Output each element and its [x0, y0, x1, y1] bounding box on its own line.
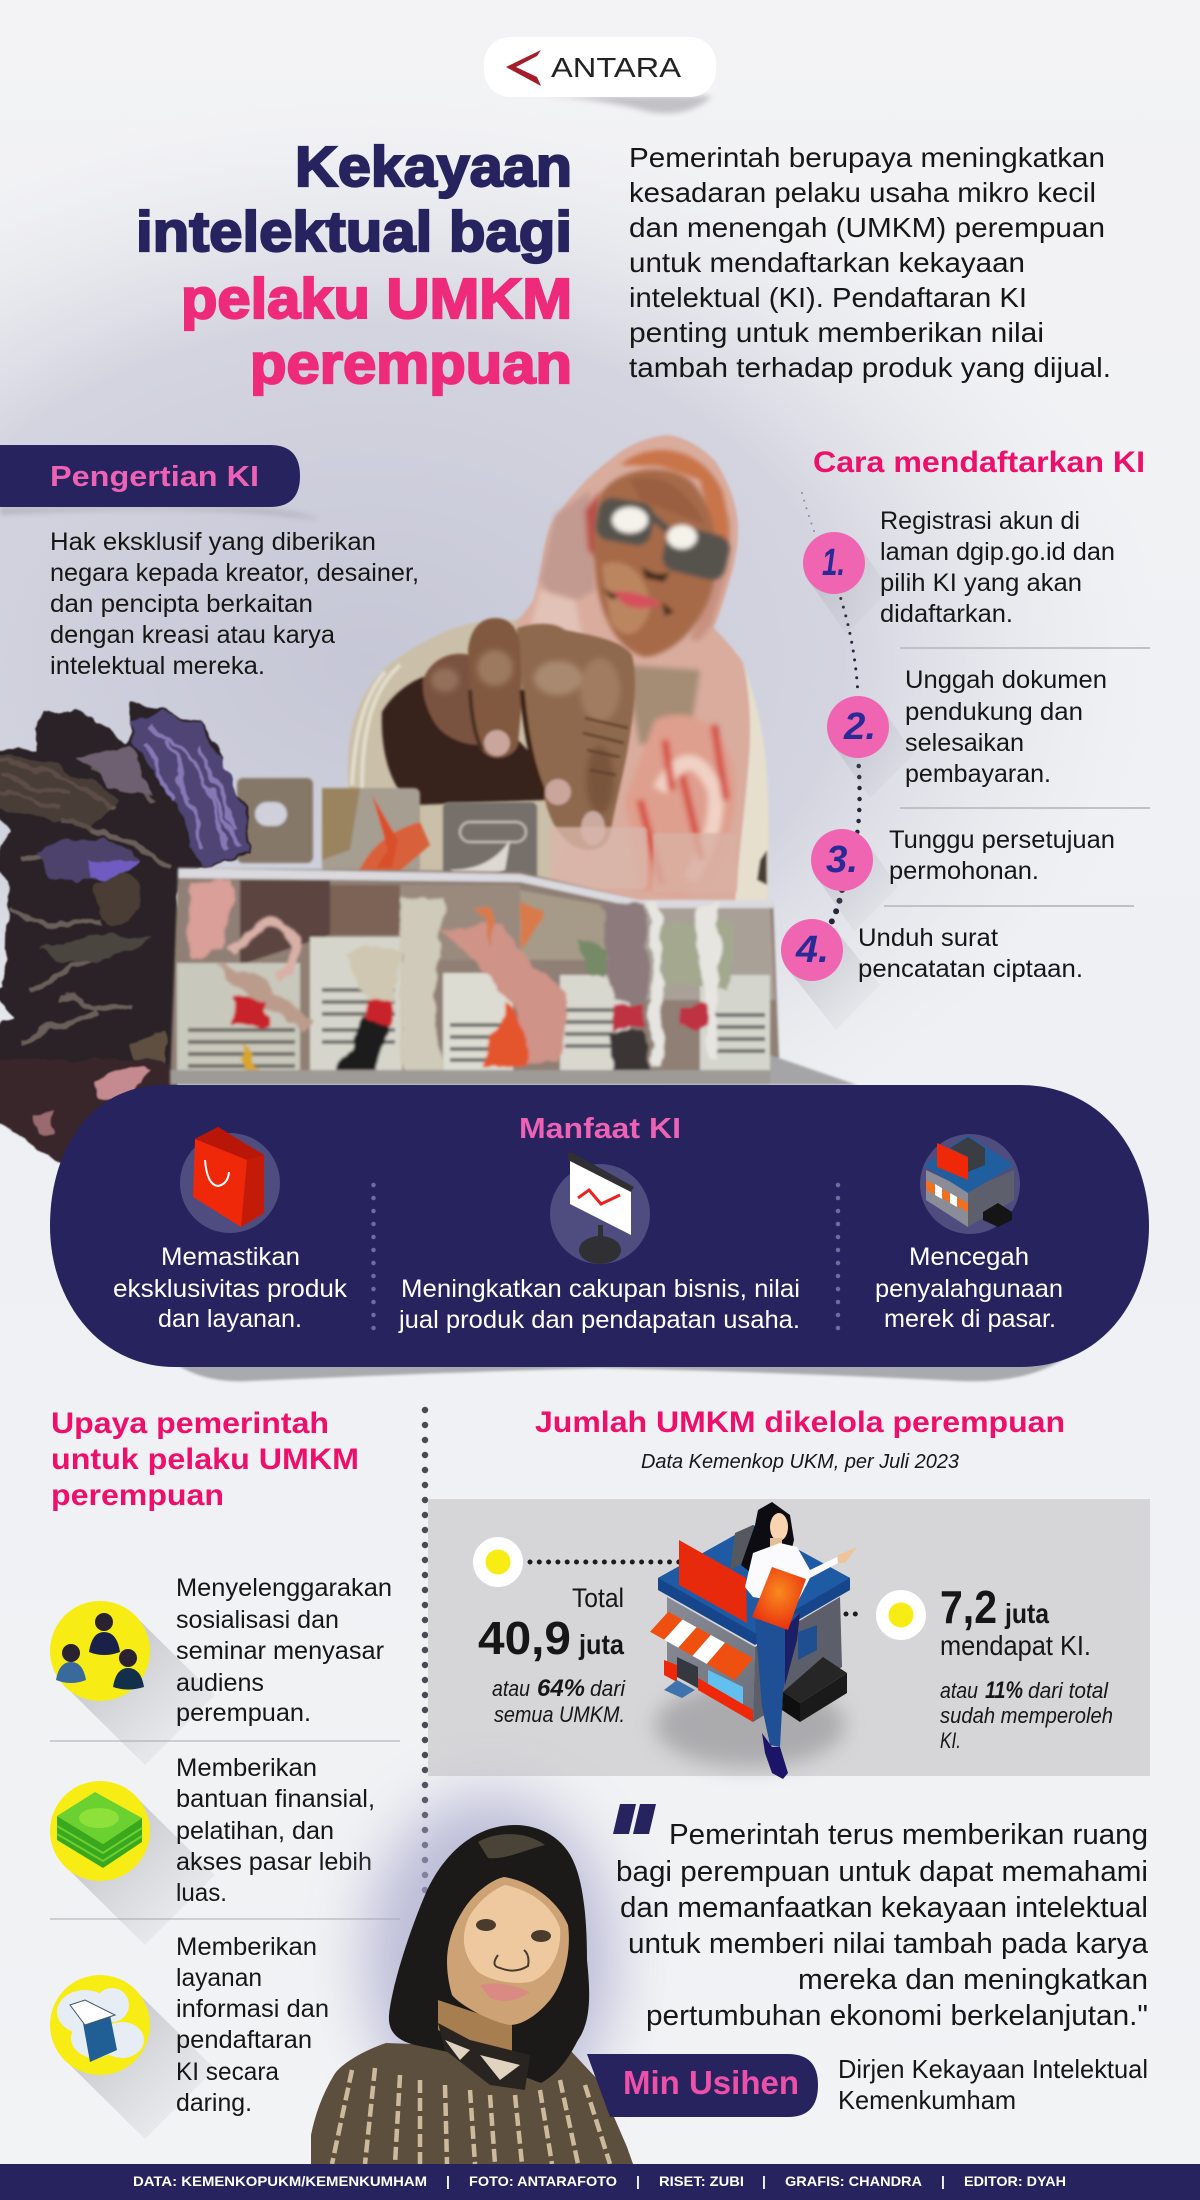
- effort 2: financial aid: Memberikan: [176, 1754, 317, 1782]
- footer credits: GRAFIS: CHANDRA: [785, 2173, 922, 2189]
- benefit text: exclusivity: eksklusivitas produk: [113, 1275, 348, 1303]
- step 4: Unduh surat: [858, 924, 998, 952]
- effort 3: online services: daring.: [176, 2089, 252, 2117]
- quote: [613, 1804, 1149, 2032]
- illustration: woman and store: [650, 1502, 857, 1779]
- step 2: pembayaran.: [905, 760, 1051, 788]
- callout: received KI: [846, 1581, 1113, 1753]
- photo: face: [594, 450, 733, 657]
- effort 1: socialisation: Menyelenggarakan: [176, 1574, 392, 1602]
- step 2: selesaikan: [905, 729, 1024, 757]
- quote: bagi perempuan untuk dapat memahami: [616, 1856, 1148, 1888]
- heading: cara mendaftarkan KI: Cara mendaftarkan KI: [813, 446, 1145, 479]
- heading: upaya pemerintah: Upaya pemerintah: [51, 1407, 329, 1440]
- step 1: didaftarkan.: [880, 600, 1013, 628]
- text: pengertian KI definition: dengan kreasi atau karya: [50, 621, 335, 649]
- callout: total: 40,9: [478, 1612, 571, 1664]
- panel: manfaat KI: [50, 1085, 1149, 1381]
- panel: pengertian KI: Pengertian KI: [50, 461, 259, 493]
- callout: total: juta: [578, 1629, 624, 1660]
- intro text: tambah terhadap produk yang dijual.: [629, 352, 1111, 383]
- steps: how to register: [781, 493, 1150, 1030]
- heading: upaya pemerintah: [51, 1407, 359, 1512]
- icon: quotation mark: [613, 1804, 656, 1834]
- panel: manfaat KI: Manfaat KI: [519, 1113, 681, 1145]
- effort 2: financial aid: pelatihan, dan: [176, 1817, 334, 1845]
- footer credits: [0, 2164, 1200, 2200]
- photo: transparent product boxes: [170, 868, 857, 1085]
- step 2: pendukung dan: [905, 698, 1083, 726]
- benefit text: prevent misuse: [875, 1243, 1063, 1333]
- footer credits: DATA: KEMENKOPUKM/KEMENKUMHAM: [133, 2173, 427, 2189]
- title: perempuan: [250, 332, 572, 396]
- footer credits: |: [446, 2173, 450, 2189]
- photo: jacket and hijab: [348, 435, 769, 905]
- callout: received KI: atau: [940, 1678, 978, 1703]
- effort 1: socialisation: seminar menyasar: [176, 1637, 384, 1665]
- callout: received KI: sudah memperoleh: [940, 1703, 1113, 1728]
- step 3: [811, 826, 1115, 931]
- benefit text: prevent misuse: merek di pasar.: [884, 1305, 1056, 1333]
- step 2: [827, 666, 1107, 798]
- effort 3: online services: pendaftaran: [176, 2026, 312, 2054]
- photo: dark purple woven material: [0, 703, 252, 1162]
- callout: total: semua UMKM.: [494, 1702, 625, 1727]
- effort 3: online services: KI secara: [176, 2058, 279, 2086]
- effort 3: online services: layanan: [176, 1964, 262, 1992]
- step 3: permohonan.: [889, 857, 1039, 885]
- step 2: Unggah dokumen: [905, 666, 1107, 694]
- government effort list: [50, 1574, 400, 2139]
- benefit text: exclusivity: Memastikan: [161, 1243, 300, 1271]
- heading: jumlah UMKM: Jumlah UMKM dikelola perempuan: [535, 1406, 1065, 1439]
- photo: scarf pattern: [530, 480, 735, 895]
- effort 1: socialisation: sosialisasi dan: [176, 1606, 339, 1634]
- step 1: [803, 507, 1115, 634]
- benefit text: prevent misuse: penyalahgunaan: [875, 1275, 1063, 1303]
- quote portrait: Min Usihen: [311, 1795, 633, 2164]
- intro text: kesadaran pelaku usaha mikro kecil: [629, 177, 1096, 208]
- benefit text: business reach: [398, 1275, 800, 1334]
- footer credits: RISET: ZUBI: [659, 2173, 744, 2189]
- intro text: Pemerintah berupaya meningkatkan: [629, 142, 1105, 173]
- data source note: Data Kemenkop UKM, per Juli 2023: [641, 1451, 959, 1473]
- benefit text: prevent misuse: Mencegah: [909, 1243, 1029, 1271]
- step 1: 1.: [822, 542, 845, 584]
- callout: total: atau: [492, 1676, 530, 1701]
- step 1: Registrasi akun di: [880, 507, 1080, 535]
- logo badge: [484, 37, 716, 113]
- title: Kekayaan: [295, 135, 572, 199]
- panel: pengertian KI: [0, 445, 320, 520]
- step 1: laman dgip.go.id dan: [880, 538, 1115, 566]
- callout: received KI: mendapat KI.: [940, 1630, 1091, 1661]
- text: pengertian KI definition: intelektual mereka.: [50, 652, 265, 680]
- benefit text: exclusivity: dan layanan.: [158, 1305, 302, 1333]
- icon: presentation board: [550, 1153, 650, 1264]
- name badge: Min Usihen: [587, 2054, 818, 2117]
- step 1: pilih KI yang akan: [880, 569, 1082, 597]
- intro text: untuk mendaftarkan kekayaan: [629, 247, 1025, 278]
- callout: total: 64%: [537, 1675, 585, 1702]
- vertical dotted divider: [422, 1410, 428, 1900]
- step 3: 3.: [826, 839, 858, 881]
- intro text: [629, 142, 1111, 383]
- effort 2: financial aid: bantuan finansial,: [176, 1785, 375, 1813]
- effort 1: socialisation: [50, 1574, 392, 1765]
- title: intelektual bagi: [136, 200, 572, 264]
- effort 2: financial aid: luas.: [176, 1879, 227, 1907]
- effort 3: online services: Memberikan: [176, 1933, 317, 1961]
- footer credits: EDITOR: DYAH: [964, 2173, 1066, 2189]
- quote: Pemerintah terus memberikan ruang: [669, 1819, 1148, 1851]
- effort 2: financial aid: [50, 1754, 375, 1945]
- effort 3: online services: [50, 1933, 329, 2139]
- benefit text: business reach: jual produk dan pendapatan usaha.: [398, 1306, 800, 1334]
- name badge: Min Usihen: Min Usihen: [623, 2064, 799, 2101]
- title: [136, 135, 572, 396]
- benefit text: business reach: Meningkatkan cakupan bisnis, nilai: [401, 1275, 800, 1303]
- text: pengertian KI definition: [50, 528, 419, 680]
- text: pengertian KI definition: dan pencipta berkaitan: [50, 590, 313, 618]
- intro text: penting untuk memberikan nilai: [629, 317, 1044, 348]
- photo: woman pointing at handicraft products: [0, 435, 857, 1162]
- photo: product header cards: [237, 778, 737, 893]
- effort 1: socialisation: perempuan.: [176, 1699, 311, 1727]
- footer credits: |: [636, 2173, 640, 2189]
- callout: received KI: 11%: [985, 1677, 1023, 1704]
- photo: hand: [382, 618, 635, 850]
- step 4: [781, 919, 1083, 1030]
- heading: upaya pemerintah: perempuan: [51, 1479, 224, 1512]
- callout: received KI: 7,2: [940, 1581, 997, 1633]
- speaker title: [838, 2054, 1148, 2115]
- text: pengertian KI definition: negara kepada kreator, desainer,: [50, 559, 419, 587]
- callout: received KI: KI.: [940, 1728, 961, 1753]
- footer credits: |: [941, 2173, 945, 2189]
- step 4: pencatatan ciptaan.: [858, 955, 1083, 983]
- icon: shopping bag: [180, 1127, 280, 1233]
- logo badge: ANTARA: [551, 52, 681, 83]
- quote: mereka dan meningkatkan: [798, 1964, 1148, 1996]
- quote: untuk memberi nilai tambah pada karya: [628, 1928, 1149, 1960]
- callout: total: Total: [572, 1583, 624, 1613]
- step 2: 2.: [843, 706, 876, 748]
- intro text: intelektual (KI). Pendaftaran KI: [629, 282, 1027, 313]
- speaker title: Dirjen Kekayaan Intelektual: [838, 2054, 1148, 2084]
- footer credits: FOTO: ANTARAFOTO: [469, 2173, 617, 2189]
- callout: received KI: juta: [1004, 1598, 1049, 1629]
- quote: pertumbuhan ekonomi berkelanjutan.": [646, 2000, 1148, 2032]
- step 3: Tunggu persetujuan: [889, 826, 1115, 854]
- text: pengertian KI definition: Hak eksklusif yang diberikan: [50, 528, 376, 556]
- effort 3: online services: informasi dan: [176, 1995, 329, 2023]
- title: pelaku UMKM: [181, 267, 572, 331]
- quote: dan memanfaatkan kekayaan intelektual: [620, 1892, 1148, 1924]
- footer credits: |: [762, 2173, 766, 2189]
- panel: UMKM statistics: [428, 1499, 1150, 1779]
- intro text: dan menengah (UMKM) perempuan: [629, 212, 1105, 243]
- effort 2: financial aid: akses pasar lebih: [176, 1848, 372, 1876]
- icon: store: [920, 1134, 1020, 1234]
- step 4: 4.: [795, 929, 829, 971]
- callout: total: [473, 1537, 684, 1727]
- callout: received KI: dari total: [1028, 1678, 1109, 1703]
- callout: total: dari: [590, 1676, 626, 1701]
- effort 1: socialisation: audiens: [176, 1669, 264, 1697]
- heading: upaya pemerintah: untuk pelaku UMKM: [51, 1443, 359, 1476]
- benefit text: exclusivity: [113, 1243, 348, 1333]
- speaker title: Kemenkumham: [838, 2085, 1016, 2115]
